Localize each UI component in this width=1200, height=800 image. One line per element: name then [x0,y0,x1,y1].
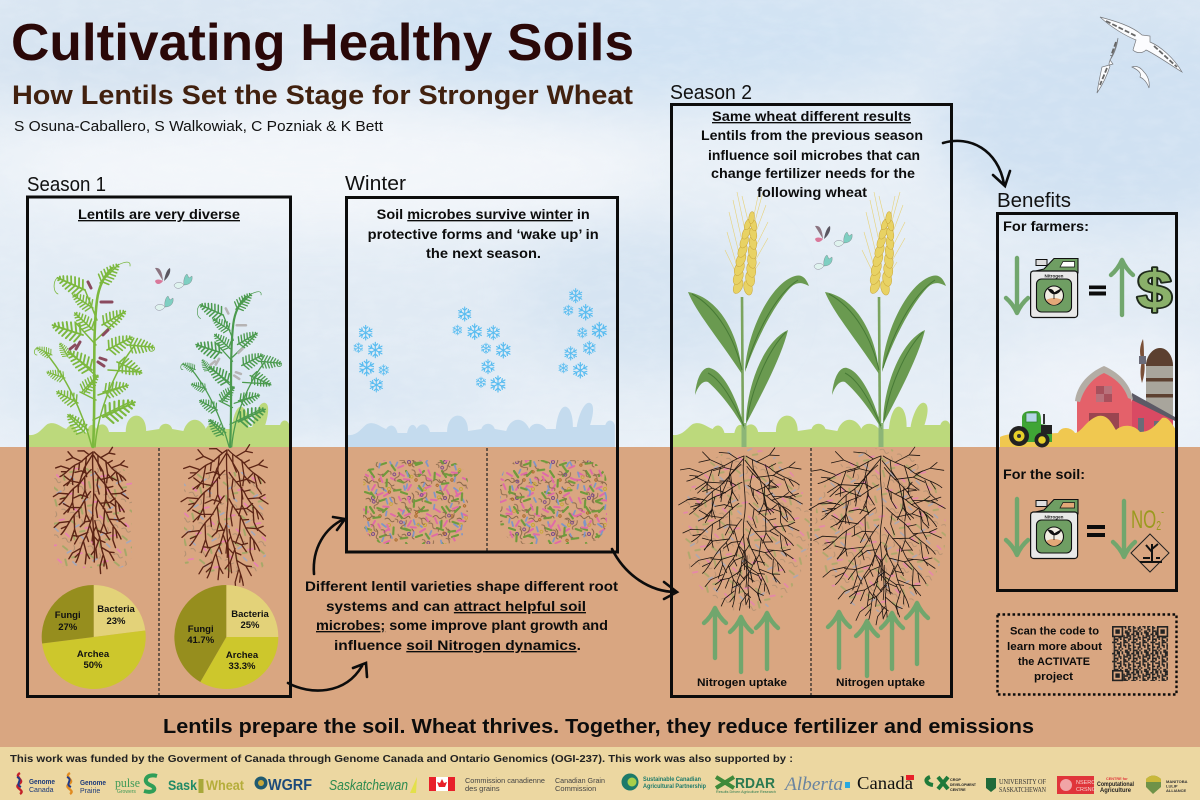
icon: dollar sign: $ [1137,260,1172,320]
heading: Season 2: Season 2 [670,82,752,104]
panel text: following wheat [757,185,868,200]
label: nitrate: 2 [1156,518,1161,533]
heading: for farmers: For farmers: [1003,218,1089,234]
microbes around wheat roots 1 [682,448,810,612]
logo: Manitoba Lulip Alliance: LULIP [1166,784,1178,788]
frosted ground [348,403,615,447]
icon: wheat plant 2 [825,192,946,447]
background: watercolour sky [0,0,1200,448]
microbes around lentil roots 2 [184,472,266,572]
logo: Commission canadienne des grains [465,776,545,793]
pie chart: variety 2: 25% [240,620,260,631]
panel text: Lentils from the previous season [701,128,923,143]
ground cover [29,403,289,447]
panel: Season 1 [28,197,290,696]
icon: less nitrate arrow [1113,501,1135,557]
icon: lentil plant variety 2 [181,289,282,447]
panel border [672,104,952,696]
icon: environmental hazard [1131,534,1169,572]
logo: Centre for Computational Agriculture: CENTRE for [1106,777,1128,781]
panel text [368,207,599,261]
logo: Manitoba Lulip Alliance [1146,776,1188,794]
panel: Season 2 [672,104,957,696]
icon: equals (farmers) [1089,286,1106,296]
QR text: learn more about [1007,641,1102,653]
pie chart: variety 1: 27% [58,622,78,633]
callout: lentil varieties: Different lentil varieties shape different root [305,579,619,594]
icon: fewer fertilizer arrow (farmers) [1006,258,1028,313]
logo: Crop Development Centre: CROP [950,778,961,782]
icon: snowflakes [353,289,607,392]
logo: RDAR [716,775,776,794]
panel text: change fertilizer needs for the [711,166,916,181]
panel: Winter [346,198,618,552]
pie chart: variety 1: Fungi [55,610,81,621]
QR text: project [1034,671,1073,683]
label: nitrate: - [1161,504,1164,519]
logo: Crop Development Centre: DEVELOPMENT [950,783,977,787]
QR text: Scan the code to [1010,626,1099,638]
logo: WGRF [254,776,312,794]
logo: University of Saskatchewan: SASKATCHEWAN [999,786,1046,794]
pie chart: variety 2 [174,585,278,689]
icon: wheat plant 1 [688,192,809,447]
logo: University of Saskatchewan [986,778,1046,794]
arrows: nitrogen uptake 1 [704,608,778,672]
icon: profit arrow [1111,260,1133,315]
logo: pulse growers: Growers [117,789,136,795]
icon: farm scene [1000,339,1176,448]
icon: equals (soil) [1087,525,1105,537]
icon: fewer fertilizer arrow (soil) [1006,499,1028,555]
panel border [998,214,1176,590]
subtitle: How Lentils Set the Stage for Stronger Wheat [12,80,633,110]
logo: Sustainable Canadian Agricultural Partnership [622,774,706,790]
panel text: Soil microbes survive winter in [377,207,590,222]
logo: Genome Prairie [67,773,106,795]
logo: Alberta: Alberta [783,774,843,795]
logo: RDAR: RDAR [735,775,775,792]
QR text [1007,626,1102,683]
icon: nitrogen jug (soil) [1031,500,1078,558]
icon: butterflies [814,226,852,269]
logo: Centre for Computational Agriculture: Computational [1097,782,1134,788]
label: nitrate: NO [1131,506,1168,534]
logo: Genome Canada: Canada [29,787,54,794]
panel text [701,109,923,200]
logo: Genome Canada: Genome [29,777,55,786]
logo: Sask Wheat: Wheat [206,777,244,793]
takeaway banner: Lentils prepare the soil. Wheat thrives. Together, they reduce fertilizer and emissions [163,716,1034,738]
ground cover [673,403,950,447]
pie chart: variety 1 [42,585,146,689]
pie chart: variety 2: Bacteria [231,609,269,620]
logo: Crop Development Centre: CENTRE [950,788,966,792]
panel: Benefits [998,214,1176,590]
logo: WGRF: WGRF [268,777,312,794]
logo: Canadian Grain Commission: Commission [555,784,596,793]
pie chart: variety 1: Bacteria [97,604,135,615]
soil band [0,447,1200,748]
panel text: Same wheat different results [712,109,911,124]
microbes left [363,460,468,544]
roots: wheat 1 [674,436,813,612]
pie chart: variety 2: 33.3% [229,661,256,672]
pie chart: variety 2: Archea [226,650,259,661]
logo: Commission canadienne des grains: Commission canadienne [465,776,545,785]
panel text: the next season. [426,246,541,261]
pie chart: variety 1: 23% [106,616,126,627]
logo: pulse growers: pulse [115,775,140,790]
panel text: Lentils are very diverse [78,207,241,222]
roots: wheat 2 [804,434,957,627]
arrow: Winter to Season 2 [612,549,677,599]
heading: Season 1: Season 1 [27,174,106,196]
funder logos [17,773,1188,795]
logo: Genome Prairie: Genome [80,778,106,787]
logo: Canadian Grain Commission: Canadian Grain [555,776,605,785]
logo: Centre for Computational Agriculture: Agriculture [1100,788,1132,794]
panel text: protective forms and ‘wake up’ in [368,227,599,242]
arrow: Season 2 to Benefits [943,141,1010,186]
logo: NSERC [1057,776,1096,794]
roots: lentil 1 [51,436,135,575]
label: nitrogen uptake 2: Nitrogen uptake [836,677,925,689]
funders strip [0,747,1200,800]
logo: Sask Wheat: Sask [168,777,197,793]
logo: Saskatchewan: Saskatchewan [329,777,408,794]
roots: lentil 2 [178,432,275,593]
logo: Canada wordmark: Canada [857,773,913,793]
logo: Centre for Computational Agriculture [1097,777,1134,794]
QR code [1112,626,1168,681]
callout: lentil varieties: systems and can attract helpful soil [326,599,586,614]
arrow: text to Winter [314,517,345,574]
logo: pulse growers [115,775,157,795]
callout: lentil varieties: microbes; some improve plant growth and [316,618,608,633]
icon: butterflies [155,268,192,310]
title: Cultivating Healthy Soils [11,14,634,72]
logo: Sustainable Canadian Agricultural Partnership: Agricultural Partnership [643,784,706,790]
panel border [346,198,618,552]
logo: Manitoba Lulip Alliance: ALLIANCE [1166,788,1187,793]
microbes around wheat roots 2 [814,448,946,612]
callout: lentil varieties [305,579,619,653]
logo: Crop Development Centre [926,777,977,792]
logo: Canadian Grain Commission [555,776,605,793]
authors: S Osuna-Caballero, S Walkowiak, C Pozniak & K Bett [14,118,384,135]
heading: Benefits: Benefits [997,190,1071,212]
panel text: influence soil microbes that can [708,148,920,163]
logo: Sask Wheat [168,777,244,793]
QR text: the ACTIVATE [1018,656,1090,668]
logo: RDAR: Results Driven Agriculture Research [716,790,776,794]
funding statement: This work was funded by the Goverment of Canada through Genome Canada and Ontario Genomics (OGI-237). This work was also supported by : [10,753,793,765]
microbes around lentil roots 1 [54,468,132,568]
arrow: Season 1 to Winter [288,663,367,691]
logo: University of Saskatchewan: UNIVERSITY OF [999,778,1046,786]
icon: lentil plant variety 1 [34,259,155,447]
heading: for the soil: For the soil: [1003,466,1085,482]
callout: lentil varieties: influence soil Nitrogen dynamics . [334,638,581,653]
icon: birds [1097,17,1182,93]
logo: Manitoba Lulip Alliance: MANITOBA [1166,779,1188,784]
pie chart: variety 2: 41.7% [187,635,215,646]
logo: NSERC: CRSNG [1076,787,1096,793]
icon: nitrogen jug (farmers) [1031,258,1078,318]
pie chart: variety 1: 50% [83,660,103,671]
logo: NSERC: NSERC [1076,780,1095,786]
arrows: nitrogen uptake 2 [828,603,928,676]
logo: Canadian flag [429,777,455,791]
heading: Winter: Winter [345,173,406,195]
panel border [28,197,290,696]
logo: Genome Canada [17,773,55,794]
pie chart: variety 2: Fungi [188,624,214,635]
panel: QR code callout [998,614,1176,694]
logo: Sustainable Canadian Agricultural Partnership: Sustainable Canadian [643,777,701,783]
microbes right [500,460,607,544]
logo: Genome Prairie: Prairie [80,788,100,795]
label: nitrogen uptake 1: Nitrogen uptake [697,677,787,689]
logo: Commission canadienne des grains: des grains [465,784,500,793]
pie chart: variety 1: Archea [77,649,110,660]
